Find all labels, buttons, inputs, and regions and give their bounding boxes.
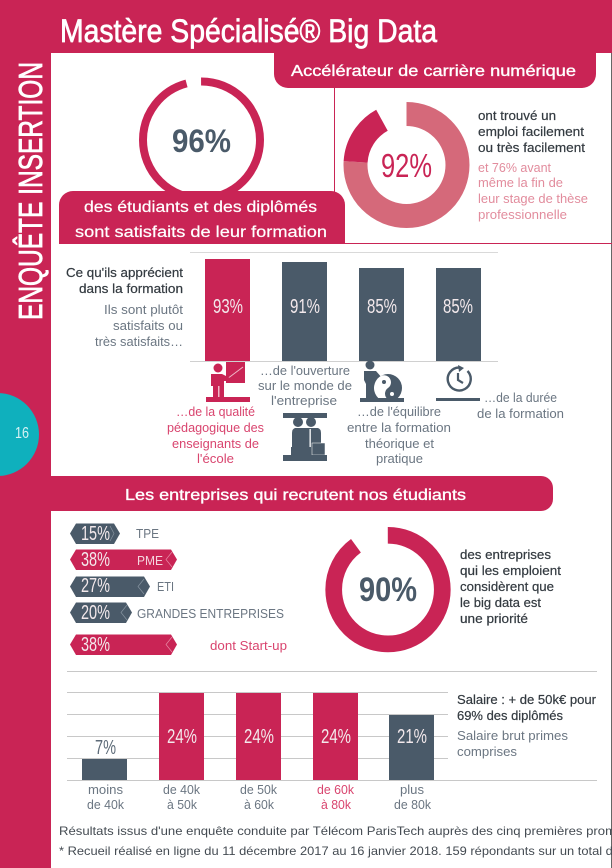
donut: 96% satisfied xyxy=(143,82,260,198)
bar chart: salary: 24% xyxy=(244,726,274,748)
page number badge: 16 xyxy=(15,425,29,442)
callout: satisfied students: des étudiants et des diplômés xyxy=(84,199,317,216)
text: salary note xyxy=(457,693,596,759)
text: salary note: Salaire : + de 50k€ pour xyxy=(457,693,596,707)
icon: clock xyxy=(436,365,480,401)
company size bars: GRANDES ENTREPRISES xyxy=(137,607,284,621)
text: job finding: ou très facilement xyxy=(478,140,585,155)
header band with title xyxy=(0,0,612,53)
text: what they appreciate: satisfaits ou xyxy=(113,319,183,333)
company size bars: TPE xyxy=(136,527,159,541)
company size bars: ETI xyxy=(157,580,174,594)
bar chart: satisfaction: 85% xyxy=(367,296,397,318)
company size bars: 15% xyxy=(81,523,110,545)
panel heading: career accelerator xyxy=(274,50,596,88)
text: job finding: ont trouvé un xyxy=(478,108,556,123)
donut: 92% found a job xyxy=(356,114,458,216)
bar chart: salary: 21% xyxy=(397,726,427,748)
company size bars xyxy=(70,523,287,656)
text: job finding: emploi facilement xyxy=(478,124,584,139)
left sidebar xyxy=(0,0,51,868)
company size bars: 20% xyxy=(81,602,110,624)
label: duration xyxy=(477,391,564,421)
text: big data priority xyxy=(460,548,562,626)
text: job finding: professionnelle xyxy=(478,208,567,222)
bar chart: salary: de 50k xyxy=(240,783,278,797)
text: what they appreciate xyxy=(66,266,184,349)
label: openness to business xyxy=(258,364,352,408)
text: what they appreciate: Ce qu'ils apprécient xyxy=(66,266,184,280)
text: salary note: Salaire brut primes xyxy=(457,729,568,743)
bar chart: satisfaction xyxy=(190,252,498,362)
icon: person with yin-yang xyxy=(360,360,404,407)
header band with title: Mastère Spécialisé® Big Data xyxy=(60,13,437,49)
bar chart: salary: de 40k xyxy=(87,798,125,812)
company size bars: PME xyxy=(137,554,163,568)
bar chart: satisfaction: 85% xyxy=(443,296,473,318)
section heading: recruiting companies: Les entreprises qui recrutent nos étudiants xyxy=(125,487,466,504)
label: teaching quality: pédagogique des xyxy=(167,421,264,435)
bar chart: satisfaction: 93% xyxy=(213,296,243,318)
text: big data priority: une priorité xyxy=(460,612,528,626)
text: big data priority: qui les emploient xyxy=(460,564,562,578)
label: openness to business: sur le monde de xyxy=(258,379,352,393)
bar chart: salary xyxy=(67,671,597,812)
label: balance: entre la formation xyxy=(347,421,451,435)
footnote: * Recueil réalisé en ligne du 11 décembre 2017 au 16 janvier 2018. 159 répondants sur un total de xyxy=(59,844,612,858)
donut: 90% companies xyxy=(334,535,442,644)
footnote xyxy=(59,824,612,858)
text: salary note: 69% des diplômés xyxy=(457,709,563,723)
label: teaching quality: …de la qualité xyxy=(176,405,255,419)
label: teaching quality xyxy=(167,405,264,466)
section heading: recruiting companies xyxy=(51,476,553,511)
label: balance: théorique et xyxy=(365,437,435,451)
company size bars: dont Start-up xyxy=(210,639,287,653)
text: job finding: leur stage de thèse xyxy=(478,192,588,206)
text: job finding: même la fin de xyxy=(478,176,563,190)
bar chart: satisfaction: 91% xyxy=(290,296,320,318)
bar chart: salary: de 60k xyxy=(317,783,355,797)
bar chart: salary: plus xyxy=(400,783,424,797)
bar chart: salary: à 80k xyxy=(321,798,352,812)
donut: 90% companies: 90% xyxy=(359,571,417,609)
bar chart: salary: moins xyxy=(88,783,123,797)
text: job finding: et 76% avant xyxy=(478,161,552,175)
label: duration: de la formation xyxy=(477,407,564,421)
label: balance: …de l'équilibre xyxy=(357,405,441,419)
footnote: Résultats issus d'une enquête conduite par Télécom ParisTech auprès des cinq premières promotions xyxy=(59,824,612,838)
callout: satisfied students xyxy=(59,191,345,244)
icon: business people xyxy=(283,413,327,461)
page number badge xyxy=(0,393,39,476)
bar chart: salary: 24% xyxy=(321,726,351,748)
bar chart: salary: 7% xyxy=(95,737,116,759)
text: job finding xyxy=(478,108,588,222)
icon: teacher xyxy=(206,362,250,402)
callout: satisfied students: sont satisfaits de leur formation xyxy=(75,224,327,241)
donut: 96% satisfied: 96% xyxy=(172,123,231,159)
panel heading: career accelerator: Accélérateur de carrière numérique xyxy=(291,63,576,80)
label: balance xyxy=(347,405,451,466)
company size bars: 38% xyxy=(81,549,110,571)
bar chart: salary: de 40k xyxy=(163,783,201,797)
text: big data priority: des entreprises xyxy=(460,548,551,562)
text: big data priority: considèrent que xyxy=(460,580,554,594)
label: teaching quality: l'école xyxy=(197,452,234,466)
text: what they appreciate: très satisfaits… xyxy=(95,335,183,349)
label: openness to business: …de l'ouverture xyxy=(260,364,350,378)
bar chart: salary: de 80k xyxy=(394,798,432,812)
label: teaching quality: enseignants de xyxy=(172,437,259,451)
label: balance: pratique xyxy=(376,452,423,466)
company size bars: 38% xyxy=(81,634,110,656)
text: what they appreciate: Ils sont plutôt xyxy=(104,303,184,317)
text: salary note: comprises xyxy=(457,745,517,759)
label: openness to business: l'entreprise xyxy=(271,394,337,408)
bar chart: salary: à 50k xyxy=(167,798,198,812)
bar chart: salary: à 60k xyxy=(244,798,275,812)
label: duration: …de la durée xyxy=(484,391,557,405)
company size bars: 27% xyxy=(81,575,110,597)
bar chart: salary: 24% xyxy=(167,726,197,748)
donut: 92% found a job: 92% xyxy=(381,147,432,184)
text: big data priority: le big data est xyxy=(460,596,542,610)
text: what they appreciate: dans la formation xyxy=(79,282,183,296)
